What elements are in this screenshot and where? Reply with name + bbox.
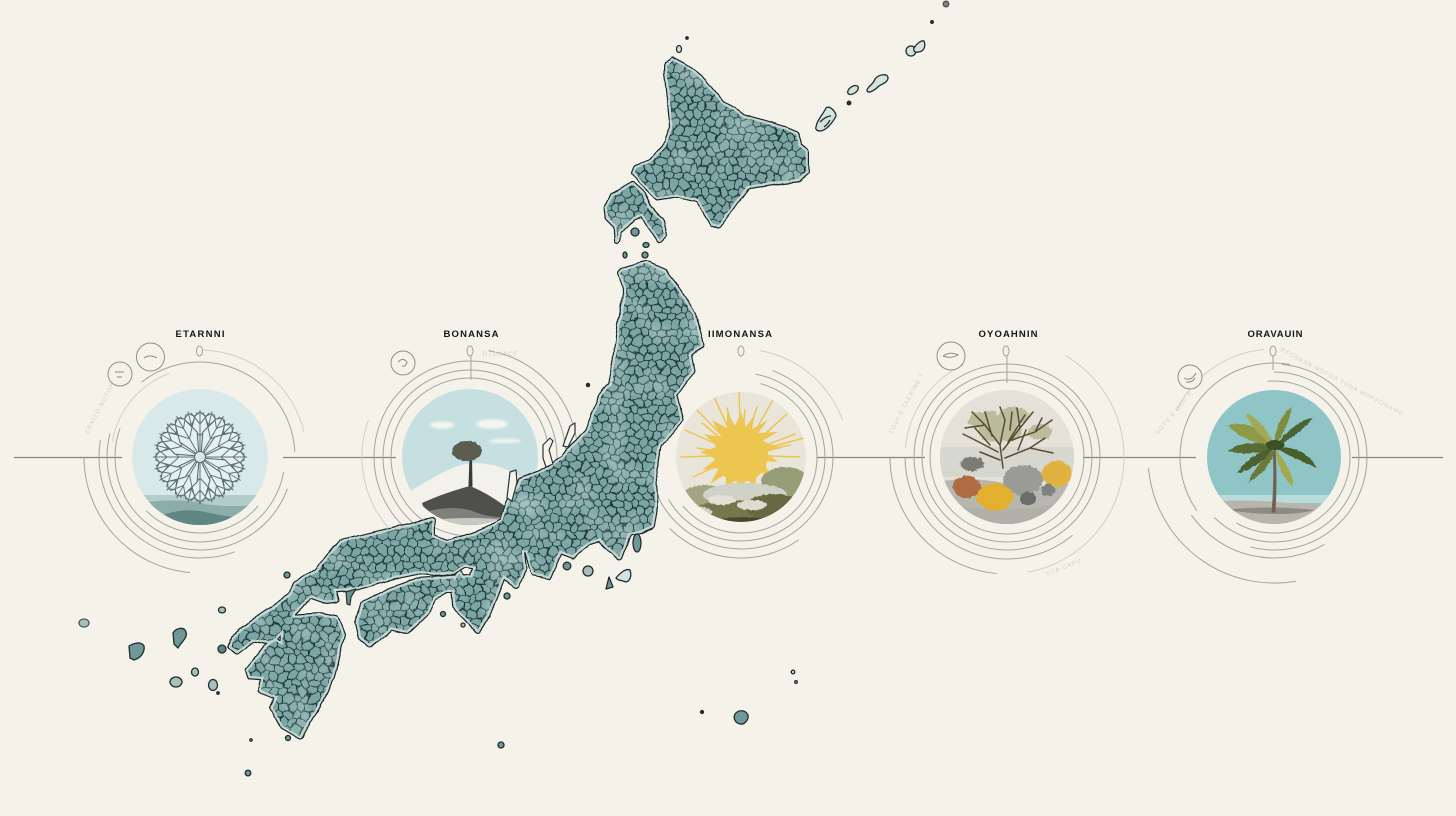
small icon circles 1 [108, 343, 164, 386]
map of Japan [227, 56, 810, 740]
illustration: mountain and tree [400, 387, 540, 530]
panel: climate zone 5 palm [1148, 330, 1403, 584]
panel: climate zone 3 sun [658, 330, 843, 558]
orbit rings 5 [1128, 311, 1420, 603]
illustration: palm tree on beach [1207, 390, 1341, 524]
panel: climate zone 2 mountain [361, 330, 577, 536]
branching tree [968, 407, 1052, 442]
illustration: coral and rocks [940, 390, 1074, 524]
small icon circle 5 [1178, 365, 1202, 389]
small icon circle 4 [937, 342, 965, 370]
sun rays [681, 389, 804, 477]
micro caption 4: ZQUI E TAERINE T [888, 372, 926, 435]
orbit rings 2 [318, 305, 622, 609]
cell mosaic fill [232, 60, 806, 736]
micro caption 5: SOTV V OOP P [1155, 391, 1195, 436]
heading: OYOAHNIN: OYOAHNIN [978, 329, 1038, 340]
small icon circle 2 [391, 351, 415, 375]
pale coastal band [231, 60, 805, 736]
heading: ETARNNI: ETARNNI [176, 329, 224, 340]
heading: ORAVAUIN: ORAVAUIN [1248, 329, 1303, 340]
palm fronds [1228, 407, 1317, 487]
heading: BONANSA: BONANSA [444, 329, 499, 340]
coast outline [231, 60, 805, 736]
illustration: sun over shrubs [676, 392, 806, 522]
micro caption 2: RTOASCF [483, 352, 518, 358]
panel: climate zone 4 coral and rocks [888, 330, 1124, 576]
orbit rings 3 [600, 316, 882, 598]
orbit rings 1 [67, 324, 333, 590]
micro caption 1: ZRAITO NOTOP [84, 382, 116, 435]
outlying small islands [79, 1, 949, 776]
shrubs [685, 466, 804, 522]
heading: IIMONANSA: IIMONANSA [708, 329, 772, 340]
illustration: snowflake tree [130, 387, 270, 530]
orbit rings 4 [847, 297, 1167, 617]
panel: climate zone 1 snowflake [84, 330, 304, 573]
coastal loop islets [346, 423, 575, 605]
micro caption 4b: OTA CAPU [1046, 558, 1083, 578]
timeline connector lines [14, 456, 1443, 458]
micro caption 5b: RTOSAAN NOFOA TONA MOPFONAMO [1279, 347, 1405, 418]
